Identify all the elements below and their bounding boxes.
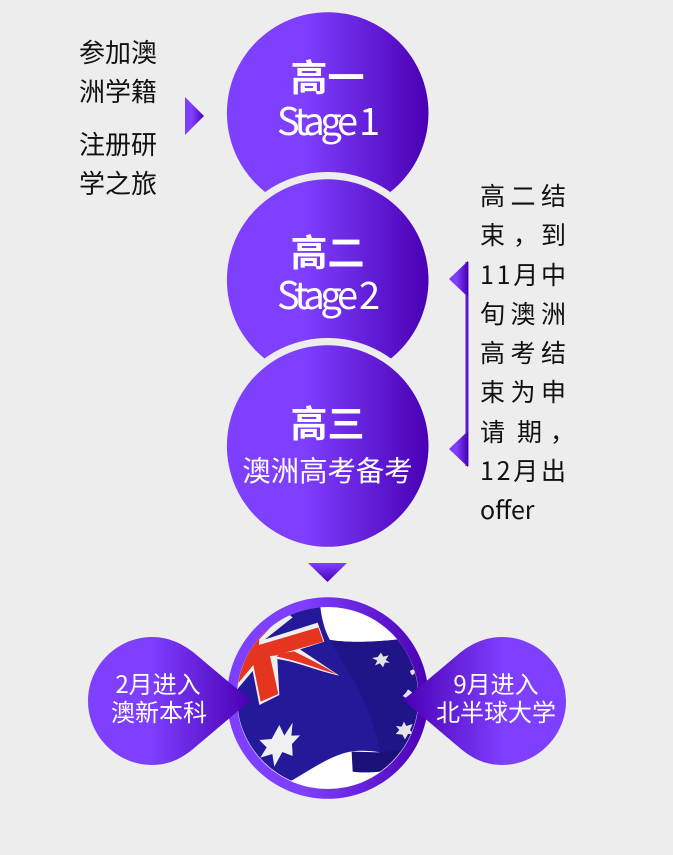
text: right note: offer bbox=[480, 491, 535, 527]
text: right note: 旬澳洲 bbox=[480, 295, 566, 331]
text: right note: 期 bbox=[517, 413, 542, 449]
label: Stage 2: 2 bbox=[359, 265, 380, 320]
text: right note: 束 bbox=[480, 216, 505, 252]
label: Stage 1: 1 bbox=[359, 91, 380, 146]
callout: 2月进入 澳新本科: 澳新本科 bbox=[111, 693, 207, 728]
callout: 9月进入 北半球大学: 北半球大学 bbox=[436, 693, 556, 728]
label: Stage 1: Stage bbox=[277, 91, 358, 146]
flag medallion bbox=[228, 597, 427, 799]
circle: stage 3 bbox=[220, 338, 436, 554]
text: right note: 高二结 bbox=[480, 177, 566, 213]
text: left note: 参加澳 bbox=[79, 33, 157, 70]
heading: 高一: 高一 bbox=[290, 48, 364, 102]
bracket arrow: right side bbox=[449, 261, 468, 467]
callout: 2月进入 澳新本科: 2月进入 bbox=[115, 665, 201, 700]
label: 澳洲高考备考: 澳洲高考备考 bbox=[242, 449, 413, 490]
text: right note: 请 bbox=[480, 413, 505, 449]
text: right note: 高考结 bbox=[480, 334, 566, 370]
callout: 9月进入 北半球大学: 9月进入 bbox=[453, 665, 539, 700]
circle: stage 1 bbox=[227, 12, 428, 214]
text: left note bbox=[79, 33, 157, 201]
arrow: right to stage 1 bbox=[185, 97, 204, 135]
callout: 2月进入 澳新本科 bbox=[88, 637, 251, 765]
heading: 高二: 高二 bbox=[290, 223, 364, 277]
icon: Australian flag bbox=[237, 607, 418, 780]
arrow: down bbox=[308, 563, 347, 582]
callout: 9月进入 北半球大学 bbox=[403, 637, 566, 765]
text: left note: 学之旅 bbox=[79, 164, 157, 201]
text: right note: 11月中 bbox=[480, 256, 566, 292]
heading: 高三: 高三 bbox=[290, 394, 364, 448]
text: right note: 到 bbox=[541, 216, 566, 252]
label: Stage 2: Stage bbox=[277, 265, 358, 320]
text: right note bbox=[480, 177, 575, 527]
text: right note: 束为申 bbox=[480, 373, 566, 409]
text: right note: ， bbox=[513, 216, 538, 252]
text: left note: 注册研 bbox=[79, 125, 157, 162]
text: right note: ， bbox=[550, 413, 575, 449]
circle: stage 2 bbox=[220, 172, 436, 388]
text: left note: 洲学籍 bbox=[79, 72, 157, 109]
text: right note: 12月出 bbox=[480, 452, 566, 488]
